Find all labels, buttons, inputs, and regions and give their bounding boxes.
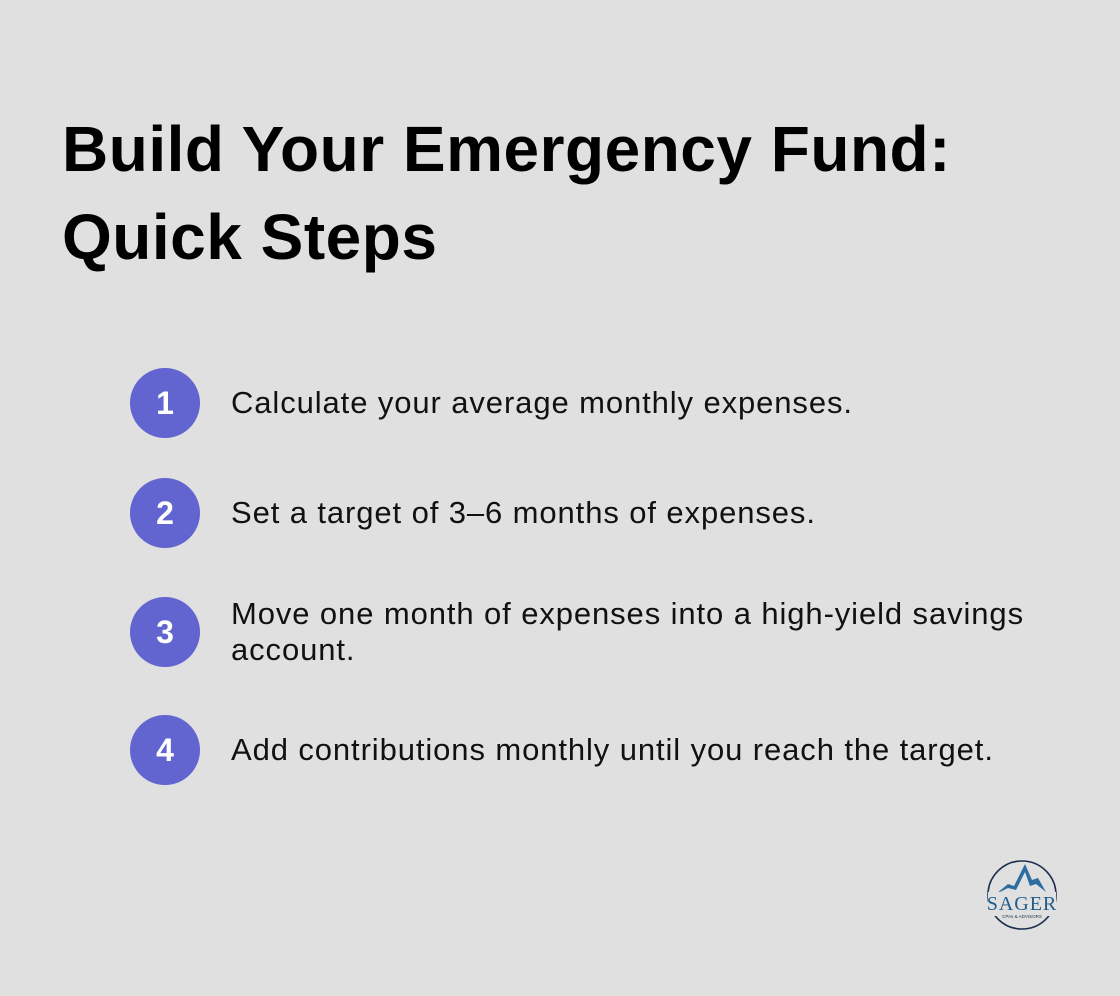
step 1: 1 bbox=[156, 384, 174, 420]
logo: SAGER bbox=[987, 893, 1057, 915]
title: Quick Steps bbox=[62, 201, 437, 273]
logo: CPAs & ADVISORS bbox=[1002, 914, 1042, 919]
title: Build Your Emergency Fund: bbox=[62, 113, 951, 185]
step 4: 4 bbox=[156, 732, 174, 768]
step 3: Move one month of expenses into a high-yield savings account. bbox=[231, 596, 1024, 667]
step 1 bbox=[130, 368, 853, 438]
step 2: 2 bbox=[156, 494, 174, 530]
step 2 bbox=[130, 478, 816, 548]
step 2: Set a target of 3–6 months of expenses. bbox=[231, 495, 816, 530]
step 3: 3 bbox=[156, 614, 174, 650]
title bbox=[62, 113, 951, 273]
step 4: Add contributions monthly until you reach the target. bbox=[231, 732, 994, 767]
step 4 bbox=[130, 715, 994, 785]
logo bbox=[987, 860, 1057, 930]
step 1: Calculate your average monthly expenses. bbox=[231, 385, 853, 420]
